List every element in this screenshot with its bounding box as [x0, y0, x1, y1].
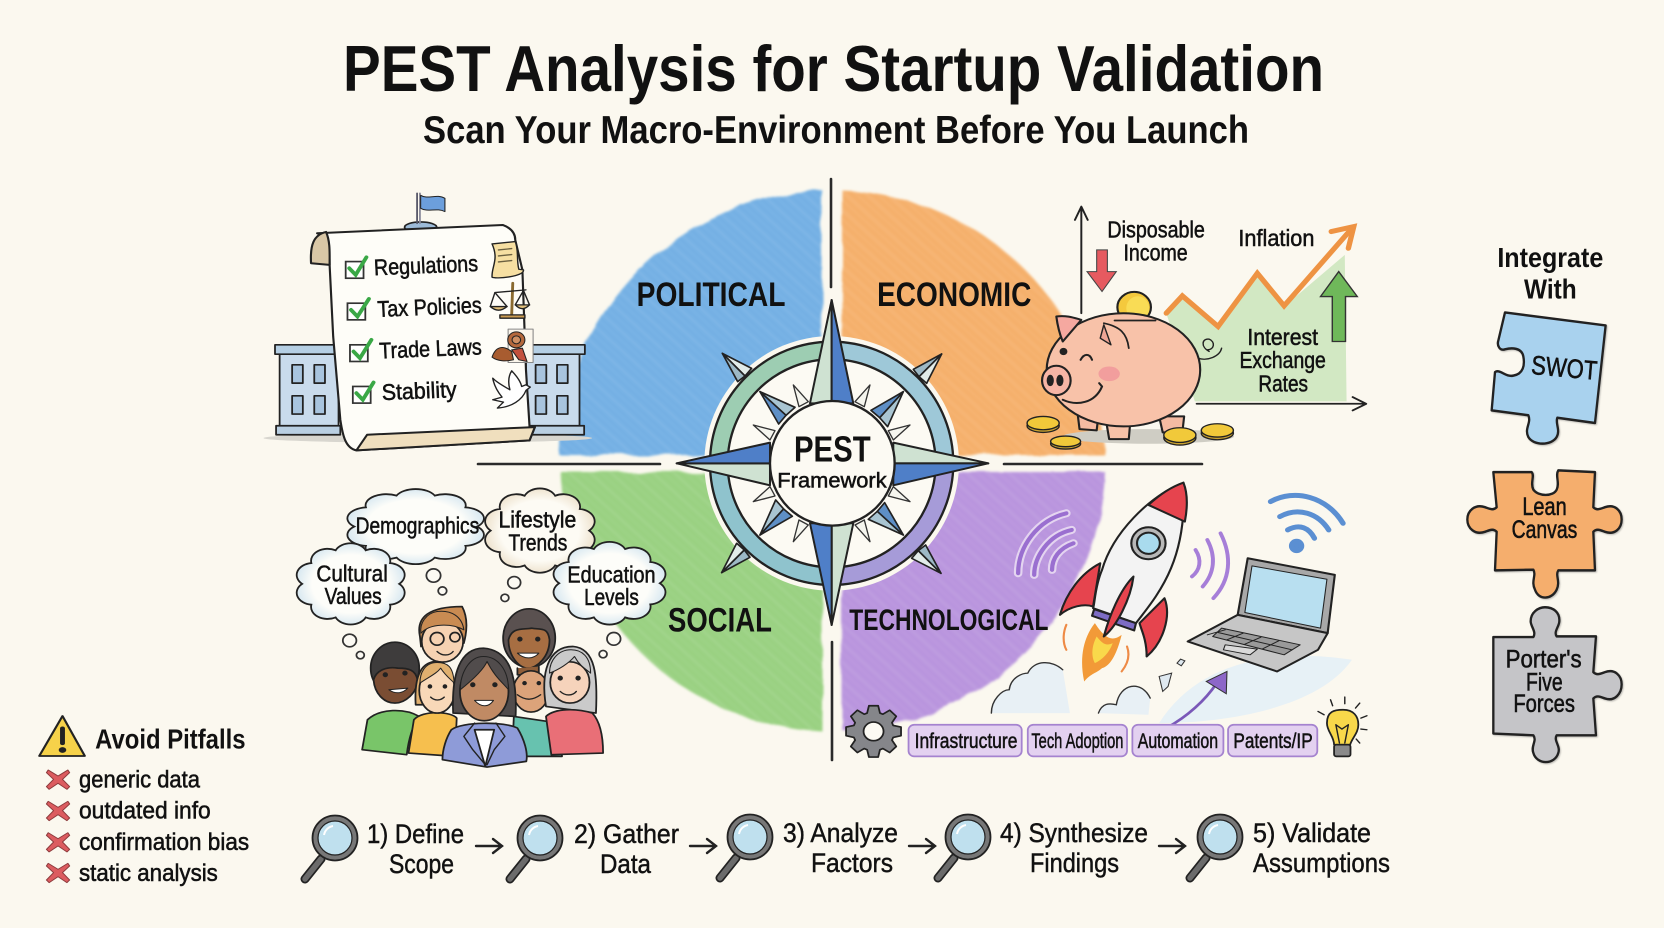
- step 4: synthesize findings: Findings: [1030, 848, 1119, 878]
- step 4: synthesize findings: 4) Synthesize: [1000, 818, 1148, 848]
- icon: gear: [846, 706, 901, 757]
- compass ring: [710, 342, 953, 585]
- economic labels: [1107, 217, 1326, 397]
- check item: stability: [353, 377, 457, 405]
- quadrant: economic: [842, 190, 1105, 455]
- person: man with glasses: [419, 607, 466, 662]
- process steps: [305, 814, 1390, 879]
- puzzle piece: Lean Canvas: Lean: [1522, 493, 1567, 521]
- step 2: gather data: 2) Gather: [574, 819, 679, 849]
- icon: purple signal arcs right: [1192, 533, 1228, 598]
- check item: stability: Stability: [381, 377, 457, 405]
- icon: light bulb: [1318, 697, 1367, 756]
- tag: patents/IP: Patents/IP: [1233, 729, 1313, 753]
- pitfall: generic data: [46, 766, 200, 793]
- check item: regulations: [346, 251, 479, 280]
- step 1: define scope: 1) Define: [367, 819, 464, 849]
- compass: PEST framework: [677, 300, 988, 625]
- icon: laptop: [1188, 558, 1335, 671]
- person: teen, right: [512, 671, 562, 756]
- tag: infrastructure: Infrastructure: [915, 729, 1017, 753]
- economic illustration: [877, 207, 1366, 449]
- puzzle piece: SWOT: [1492, 312, 1606, 444]
- step 3: analyze factors: Factors: [811, 848, 893, 878]
- icon: government building: [264, 193, 592, 443]
- step 2: gather data: [510, 816, 679, 879]
- check item: tax policies: Tax Policies: [377, 292, 482, 322]
- small debris: [1159, 659, 1185, 691]
- quadrant: technological: [842, 472, 1105, 730]
- checklist: [346, 251, 482, 405]
- label: social: SOCIAL: [668, 602, 772, 639]
- icon: warning triangle: [39, 716, 85, 756]
- puzzle piece: Porter's Five Forces: Five: [1526, 669, 1563, 697]
- cloud labels: Levels: [584, 585, 639, 611]
- icon: smoke cloud: [991, 663, 1150, 715]
- economic labels: Inflation: [1238, 226, 1314, 252]
- icon: green up arrow: [1321, 272, 1357, 341]
- arrow: [476, 839, 502, 853]
- tag: tech adoption: [1028, 725, 1127, 756]
- cloud labels: Demographics: [356, 513, 479, 539]
- cloud labels: Values: [325, 584, 382, 610]
- title: PEST Analysis for Startup Validation: [343, 32, 1324, 105]
- pitfall: static analysis: static analysis: [79, 860, 218, 887]
- quadrant: social: [561, 472, 822, 731]
- icon: rocket: [1060, 483, 1187, 681]
- social illustration: [297, 488, 772, 767]
- scroll document: [311, 225, 535, 450]
- blue scribble under laptop: [1159, 656, 1352, 723]
- chart axes: [1075, 207, 1366, 410]
- icon: purple growth arrow: [1166, 671, 1227, 728]
- label: economic: ECONOMIC: [877, 276, 1031, 314]
- pitfall: outdated info: [46, 798, 211, 825]
- pitfall: generic data: generic data: [79, 766, 200, 793]
- inflation trend arrow: [1166, 227, 1354, 327]
- step 2: gather data: Data: [600, 849, 652, 879]
- icon: piggy bank: [1042, 292, 1234, 444]
- step 1: define scope: [305, 816, 464, 879]
- arrow: [690, 839, 716, 853]
- tag: tech adoption: Tech Adoption: [1031, 729, 1123, 753]
- step 4: synthesize findings: [938, 814, 1148, 878]
- puzzle piece: Porter's Five Forces: [1493, 607, 1622, 762]
- icon: peace dove: [493, 371, 530, 408]
- tag: automation: [1132, 725, 1223, 756]
- economic labels: Disposable: [1107, 217, 1205, 243]
- axis lines: [478, 179, 1202, 760]
- puzzle piece: SWOT: SWOT: [1530, 349, 1599, 386]
- tag: infrastructure: [909, 725, 1022, 756]
- pitfall: confirmation bias: confirmation bias: [79, 829, 249, 856]
- check item: trade laws: [350, 334, 482, 363]
- panel: avoid pitfalls: [39, 716, 249, 887]
- panel: quadrant backgrounds: [559, 190, 1105, 731]
- compass minor points: [722, 353, 942, 573]
- economic labels: Income: [1123, 240, 1188, 266]
- puzzle piece: Lean Canvas: Canvas: [1512, 517, 1577, 544]
- check item: tax policies: [347, 292, 482, 322]
- cloud labels: Cultural: [316, 561, 388, 587]
- arrow: [1159, 839, 1185, 853]
- technological illustration: [846, 483, 1367, 757]
- check item: trade laws: Trade Laws: [379, 334, 482, 363]
- political illustration: [264, 193, 786, 450]
- chart: area under inflation: [1166, 255, 1347, 401]
- step 5: validate assumptions: 5) Validate: [1253, 818, 1371, 848]
- economic labels: Exchange: [1239, 348, 1326, 374]
- puzzle piece: Lean Canvas: [1467, 470, 1622, 598]
- icon: wifi: [1271, 495, 1343, 551]
- integrate heading: [1497, 242, 1603, 305]
- puzzle piece: Porter's Five Forces: Porter's: [1506, 646, 1582, 674]
- center label: Framework: Framework: [777, 468, 887, 492]
- cloud labels: Lifestyle: [498, 507, 576, 533]
- pitfall: outdated info: outdated info: [79, 798, 211, 825]
- group of people: [362, 607, 603, 767]
- integrate heading: Integrate: [1497, 242, 1603, 273]
- compass main points: [677, 300, 988, 625]
- center label: PEST: PEST: [794, 429, 871, 470]
- cloud labels: Trends: [508, 530, 567, 556]
- step 5: validate assumptions: Assumptions: [1253, 848, 1390, 878]
- subtitle: Scan Your Macro-Environment Before You Launch: [423, 109, 1249, 152]
- icon: wax seal and handshake: [492, 329, 533, 362]
- check item: regulations: Regulations: [373, 251, 479, 280]
- label: technological: TECHNOLOGICAL: [849, 605, 1048, 637]
- economic labels: Interest: [1247, 325, 1318, 351]
- cloud labels: Education: [567, 562, 656, 588]
- economic labels: Rates: [1258, 371, 1308, 397]
- person: woman in blue jacket: [442, 648, 527, 767]
- cloud labels: [316, 507, 656, 611]
- arrow: [909, 839, 935, 853]
- pitfall: static analysis: [46, 860, 218, 887]
- pitfalls heading: Avoid Pitfalls: [95, 724, 246, 755]
- step 5: validate assumptions: [1190, 814, 1390, 878]
- icon: gold coins: [1027, 416, 1233, 449]
- tag: automation: Automation: [1138, 729, 1218, 753]
- integrate heading: With: [1524, 274, 1577, 305]
- compass center disc: [770, 401, 895, 526]
- icon: red down arrow: [1087, 250, 1116, 292]
- icon: purple signal arcs left: [1018, 513, 1073, 575]
- quadrant: political: [559, 190, 822, 455]
- person: blonde woman: [409, 661, 457, 756]
- tag: patents/IP: [1228, 725, 1317, 756]
- pitfall: confirmation bias: [46, 829, 249, 856]
- person: man with dark hair, back right: [503, 609, 555, 675]
- icon: balance scales: [490, 283, 530, 318]
- step 3: analyze factors: [720, 814, 898, 878]
- panel: integrate with: [1467, 242, 1622, 762]
- step 1: define scope: Scope: [389, 849, 454, 879]
- label: political: POLITICAL: [637, 276, 786, 314]
- step 3: analyze factors: 3) Analyze: [783, 818, 898, 848]
- icon: law scroll: [492, 242, 524, 278]
- puzzle piece: Porter's Five Forces: Forces: [1513, 690, 1575, 718]
- person: man, front left: [362, 642, 419, 755]
- person: grey-haired woman: [544, 646, 603, 755]
- thought clouds: [297, 488, 665, 659]
